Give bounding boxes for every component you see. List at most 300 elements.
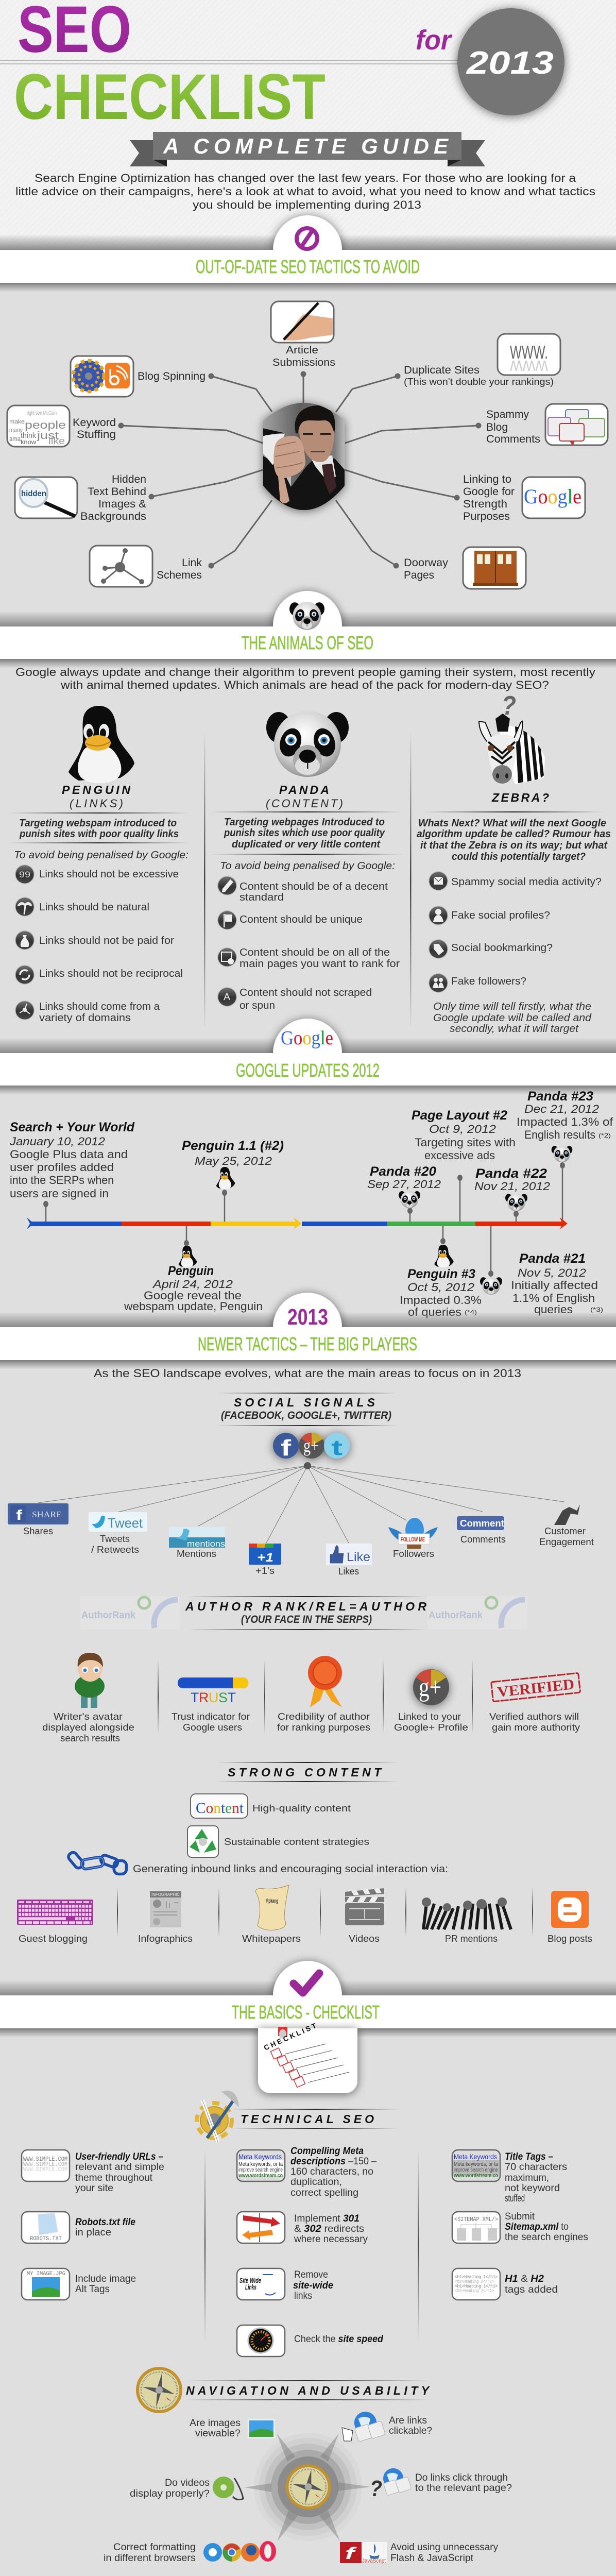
heading: author rank: AUTHOR RANK/REL=AUTHOR [185, 1600, 426, 1613]
heading: zebra: ZEBRA? [491, 791, 549, 804]
signal: customer engagement: Engagement [539, 1537, 594, 1547]
item: not excessive [15, 865, 179, 884]
item: site-wide links [237, 2268, 333, 2301]
icon: zebra with question mark [479, 691, 545, 784]
item: h1 h2 tags: <h1>Heading 1</h1> [455, 2284, 498, 2289]
zebra note: Google update will be called and [433, 1012, 592, 1024]
item: image alt tags [22, 2268, 136, 2300]
heading: author rank [185, 1600, 426, 1625]
heading: author rank: (YOUR FACE IN THE SERPS) [241, 1614, 372, 1625]
item: infographics: INFOGRAPHIC [151, 1892, 180, 1897]
signal: customer engagement: Customer [544, 1526, 586, 1536]
item: title tags: 70 characters [505, 2162, 567, 2173]
ribbon: a complete guide [130, 132, 485, 166]
event: search plus your world: Google Plus data and [10, 1148, 128, 1161]
icon: www: WWW [510, 358, 548, 375]
item: not scraped: or spun [239, 1000, 275, 1011]
item: whitepapers: Whitepapers [242, 1934, 301, 1944]
item: not scraped: Content should not scraped [239, 987, 372, 998]
icon: facebook google plus twitter: f [281, 1435, 291, 1461]
heading: the animals of seo: THE ANIMALS OF SEO [242, 632, 373, 653]
item: robots.txt: Robots.txt file [75, 2217, 135, 2228]
icon: facebook google plus twitter [273, 1433, 350, 1461]
item: flash and javascript [340, 2542, 498, 2564]
label: blog spinning: Blog Spinning [138, 370, 206, 382]
item: sitemap: <SITEMAP XML/> [454, 2216, 498, 2223]
title: CHECKLIST: CHECKLIST [14, 61, 326, 133]
item: images viewable: viewable? [195, 2428, 241, 2439]
icon: doors [463, 547, 526, 589]
icon: www [498, 334, 560, 375]
item: whitepapers [242, 1885, 301, 1944]
event: panda 20: Sep 27, 2012 [367, 1178, 441, 1191]
zebra description: algorithm update be called? Rumour has [417, 828, 611, 840]
item: user-friendly urls: your site [75, 2183, 113, 2194]
fan lines [38, 1466, 564, 1543]
heading: penguin: PENGUIN [62, 783, 130, 796]
label: duplicate sites: (This won't double your rankings) [404, 377, 554, 387]
heading: social signals: (FACEBOOK, GOOGLE+, TWITTER) [221, 1410, 391, 1421]
item: h1 h2 tags: <h2>Heading 2</h2> [455, 2279, 494, 2284]
heading: panda: PANDA [279, 783, 329, 796]
item: title tags: Title Tags – [505, 2151, 553, 2162]
item: links click through: ? [370, 2476, 382, 2501]
item: fake followers: Fake followers? [451, 976, 526, 987]
label: spammy blog comments: Spammy [486, 409, 529, 420]
event: penguin 3: Penguin #3 [407, 1267, 475, 1281]
item: verified stamp: gain more authority [492, 1722, 580, 1733]
item: title tags: improve search engine [454, 2167, 498, 2173]
item: title tags: stuffed [505, 2193, 525, 2204]
label: doorway pages [404, 557, 449, 581]
panel: newer tactics [8, 1367, 594, 1944]
image: man thumbs down [260, 399, 348, 513]
label: linking to google: Google for [463, 486, 515, 498]
penguin description [19, 818, 179, 840]
label: spammy blog comments [486, 409, 540, 445]
event: penguin 3: (*4) [465, 1309, 477, 1316]
item: inbound links [67, 1851, 448, 1875]
event: penguin: Penguin [168, 1264, 214, 1278]
event: panda 23: Panda #23 [527, 1089, 593, 1104]
item: videos [345, 1888, 384, 1944]
item: infographics [138, 1891, 193, 1944]
item: verified stamp: Verified authors will [489, 1711, 579, 1722]
zebra note: Only time will tell firstly, what the [433, 1001, 591, 1012]
item: guest blogging: Guest blogging [19, 1934, 88, 1944]
signal: comments: Comment [460, 1518, 504, 1529]
item: variety of domains: variety of domains [39, 1012, 131, 1024]
item: meta descriptions: descriptions –150 – [290, 2156, 377, 2167]
icon: panda [266, 711, 349, 777]
zebra description: could this potentially target? [452, 851, 586, 862]
label: doorway pages: Doorway [404, 557, 449, 569]
label: spammy blog comments: Blog [486, 421, 508, 433]
item: high quality content: Content [196, 1800, 244, 1817]
item: not scraped: A [224, 992, 230, 1002]
item: redirects [237, 2212, 368, 2245]
item: trust indicator [172, 1677, 250, 1733]
heading: panda: (CONTENT) [266, 797, 343, 810]
signal: followers: FOLLOW ME [401, 1536, 425, 1543]
item: social bookmarking: Social bookmarking? [451, 942, 553, 954]
intro text [15, 172, 595, 211]
item: social bookmarking [429, 939, 553, 959]
label: link schemes [157, 557, 202, 581]
item: natural [15, 897, 149, 917]
animals intro: with animal themed updates. Which animals are head of the pack for modern-day SEO? [60, 679, 549, 691]
event: penguin: webspam update, Penguin [124, 1300, 263, 1313]
column: zebra [417, 691, 611, 1035]
ribbon: a complete guide: A COMPLETE GUIDE [163, 134, 449, 158]
event: panda 22: Panda #22 [475, 1166, 547, 1181]
icon: www: WWW. [510, 342, 548, 363]
newer tactics intro: As the SEO landscape evolves, what are the main areas to focus on in 2013 [94, 1367, 521, 1380]
item: sitemap: the search engines [505, 2232, 588, 2243]
event: panda 23: Impacted 1.3% of [517, 1115, 613, 1128]
item: h1 h2 tags [452, 2268, 558, 2300]
item: robots.txt: ROBOTS.TXT [30, 2236, 62, 2242]
label: linking to google: Linking to [463, 473, 511, 485]
diagram: compass hub [245, 2433, 371, 2541]
event: page layout 2: Oct 9, 2012 [429, 1123, 496, 1136]
signal: likes: Likes [338, 1566, 359, 1577]
label: keyword stuffing [73, 417, 116, 440]
zebra note: secondly, what it will target [450, 1023, 579, 1035]
heading: navigation and usability: NAVIGATION AND USABILITY [186, 2384, 431, 2397]
label: linking to google: Strength [463, 498, 507, 510]
item: site speed [237, 2325, 383, 2357]
item: pr mentions: PR mentions [445, 1934, 498, 1944]
item: h1 h2 tags: H1 & H2 [505, 2274, 544, 2284]
item: links click through [370, 2468, 512, 2501]
intro text: Search Engine Optimization has changed over the last few years. For those who are looking for a [35, 172, 576, 184]
item: sitemap [452, 2211, 588, 2243]
event: penguin [124, 1264, 263, 1313]
item: user-friendly urls: User-friendly URLs – [75, 2151, 163, 2162]
item: user-friendly urls: WWW.SIMPLE.COM [23, 2156, 67, 2163]
icon: keyword cloud: ama [9, 435, 21, 443]
item: links clickable: Are links [389, 2415, 427, 2426]
intro text: little advice on their campaigns, here's a look at what to avoid, what you need to know and what tactics [15, 185, 595, 198]
event: penguin 3 [400, 1267, 482, 1318]
heading: the basics: THE BASICS - CHECKLIST [232, 2002, 380, 2023]
event: penguin 3: of queries [408, 1306, 461, 1318]
event: penguin: April 24, 2012 [152, 1278, 233, 1291]
item: trust indicator: Google users [183, 1722, 242, 1733]
intro text: you should be implementing during 2013 [193, 198, 421, 211]
item: site-wide links: Links [245, 2283, 256, 2291]
panda description [224, 817, 385, 850]
signal: plus ones [249, 1544, 281, 1576]
heading: social signals [221, 1396, 391, 1421]
signal: comments: Comments [460, 1534, 506, 1545]
item: guest blogging [17, 1900, 93, 1944]
timeline pins [43, 1162, 565, 1277]
label: hidden text [80, 473, 146, 522]
heading: newer tactics: NEWER TACTICS – THE BIG PLAYERS [198, 1333, 417, 1354]
item: meta descriptions: Meta Keywords [238, 2153, 282, 2161]
item: sustainable strategies: Sustainable content strategies [224, 1837, 369, 1847]
item: not paid: Links should not be paid for [39, 935, 174, 946]
signal: likes: Like [347, 1550, 370, 1564]
item: title tags: maximum, [505, 2173, 549, 2183]
item: h1 h2 tags: tags added [505, 2284, 558, 2295]
item: title tags: Meta Keywords [454, 2153, 497, 2161]
event: panda 22 [474, 1166, 550, 1193]
item: browsers: in different browsers [104, 2553, 196, 2564]
item: variety of domains [15, 1001, 160, 1024]
item: h1 h2 tags: <h1>Heading 1</h1> [455, 2275, 498, 2280]
badge: 2013: 2013 [287, 1304, 328, 1330]
icon: keyword cloud: just [37, 430, 59, 442]
item: meta descriptions [237, 2146, 377, 2198]
heading: strong content: STRONG CONTENT [228, 1766, 382, 1779]
icon: blog spinning [71, 356, 133, 397]
faded authorrank logos [80, 1596, 527, 1630]
item: inbound links: Generating inbound links and encouraging social interaction via: [133, 1863, 448, 1875]
item: spammy social: Spammy social media activity? [451, 876, 602, 888]
heading: out-of-date seo tactics: OUT-OF-DATE SEO TACTICS TO AVOID [196, 256, 420, 277]
event: search plus your world: into the SERPs when [10, 1174, 114, 1187]
item: user-friendly urls [22, 2150, 164, 2194]
animals intro [15, 666, 595, 691]
item: user-friendly urls: theme throughout [75, 2173, 153, 2183]
event: page layout 2: Page Layout #2 [412, 1108, 507, 1123]
signal: likes [326, 1544, 372, 1577]
signal: shares [8, 1503, 69, 1536]
panel: technical seo [22, 2091, 588, 2357]
item: not reciprocal [15, 965, 183, 985]
item: google plus profile [394, 1669, 468, 1733]
signal: tweets: Tweets [100, 1534, 130, 1544]
label: keyword stuffing: Stuffing [77, 429, 116, 440]
icon: zebra with question mark: ? [502, 691, 516, 721]
label: link schemes: Schemes [157, 569, 202, 581]
icon: magnifier hidden [15, 477, 77, 518]
item: unique [217, 910, 363, 930]
event: panda 20: Panda #20 [370, 1164, 436, 1179]
timeline icons [179, 1146, 572, 1295]
title: for: for [416, 25, 453, 56]
signal: mentions: mentions [187, 1539, 225, 1549]
event: panda 21: 1.1% of English [512, 1292, 595, 1304]
heading: panda [266, 783, 343, 810]
section band: the basics checklist [0, 1961, 616, 2038]
event: penguin 3: Oct 5, 2012 [407, 1281, 474, 1294]
label: article submissions [272, 345, 335, 368]
item: links click through: Do links click through [415, 2472, 508, 2483]
item: title tags: www.wordstream.co [453, 2173, 498, 2179]
event: page layout 2 [412, 1108, 516, 1162]
zebra description: Whats Next? What will the next Google [418, 818, 606, 829]
item: site-wide links: links [294, 2291, 312, 2301]
heading: penguin: (LINKS) [70, 797, 123, 810]
item: flash and javascript: Flash & JavaScript [390, 2553, 474, 2564]
icon: check mark [294, 1973, 319, 1993]
item: writer avatar: search results [60, 1733, 120, 1743]
item: flash and javascript: f [345, 2544, 357, 2563]
signal: comments [457, 1516, 506, 1545]
faded authorrank logos: AuthorRank [81, 1610, 135, 1621]
item: trust indicator: TRUST [191, 1690, 236, 1705]
label: article submissions: Submissions [272, 357, 335, 368]
label: hidden text: Images & [98, 498, 146, 510]
icon: keyword cloud: right see McCain [27, 410, 57, 416]
event: page layout 2: Targeting sites with [415, 1136, 516, 1149]
item: pr mentions [422, 1897, 511, 1944]
event: panda 21: Nov 5, 2012 [518, 1266, 586, 1279]
icon: gear and tools [197, 2091, 239, 2142]
section band: out-of-date tactics [0, 215, 616, 292]
item: decent standard [217, 876, 388, 903]
item: meta descriptions: correct spelling [290, 2188, 358, 2198]
event: search plus your world [9, 1120, 135, 1200]
item: not excessive: 99 [19, 870, 30, 879]
event: panda 23: Dec 21, 2012 [524, 1103, 599, 1115]
icon: facebook google plus twitter: g+ [303, 1435, 319, 1456]
item: image alt tags: Alt Tags [75, 2284, 110, 2295]
item: infographics: Infographics [138, 1934, 193, 1944]
zebra note [433, 1001, 592, 1035]
item: title tags [452, 2150, 567, 2204]
item: meta descriptions: 160 characters, no [290, 2166, 373, 2177]
item: redirects: & 302 redirects [294, 2224, 364, 2234]
item: not scraped [217, 987, 372, 1011]
heading: google updates 2012: GOOGLE UPDATES 2012 [236, 1060, 380, 1081]
icon: speech bubbles [545, 404, 608, 446]
icon: keyword cloud: think [21, 431, 36, 440]
signal: tweets: Tweet [108, 1515, 143, 1531]
item: writer avatar [42, 1653, 134, 1743]
icon: panda badge [289, 602, 324, 630]
item: variety of domains: Links should come from a [39, 1001, 160, 1012]
item: videos display [130, 2477, 243, 2500]
item: blog posts [547, 1891, 592, 1944]
event: panda 23: (*2) [598, 1132, 611, 1139]
item: site speed: Check the site speed [294, 2334, 383, 2345]
event: search plus your world: Search + Your World [10, 1120, 135, 1134]
item: redirects: where necessary [294, 2234, 368, 2245]
icon: keyword cloud: like [48, 436, 65, 446]
icon: article submissions [271, 301, 334, 343]
item: browsers: Correct formatting [113, 2542, 196, 2553]
event: panda 21 [511, 1251, 603, 1316]
subsection: strong content [17, 1762, 592, 1944]
heading: technical seo: TECHNICAL SEO [241, 2112, 374, 2126]
label: doorway pages: Pages [404, 569, 434, 581]
item: google plus profile: g+ [419, 1673, 441, 1702]
card: checklist: CHECKLIST [263, 2021, 318, 2052]
section band: newer tactics [0, 1293, 616, 1369]
chart: timeline 2012 [9, 1089, 613, 1318]
label: hidden text: Text Behind [88, 486, 146, 498]
item: not paid [15, 930, 174, 950]
icon: keyword cloud: people [25, 419, 66, 431]
item: credibility seal [277, 1656, 370, 1733]
signal: mentions: Mentions [177, 1549, 216, 1559]
item: whitepapers: Rpkang [266, 1898, 278, 1904]
item: user-friendly urls: WWW.SIMPLE.COM [23, 2166, 67, 2173]
item: images viewable: Are images [190, 2418, 241, 2429]
item: links clickable [342, 2412, 432, 2442]
icon: compass heading [136, 2367, 182, 2413]
year circle: 2013 [466, 45, 554, 81]
item: writer avatar: displayed alongside [42, 1722, 134, 1733]
item: user-friendly urls: WWW.SIMPLE.COM [23, 2161, 67, 2168]
event: page layout 2: excessive ads [424, 1149, 495, 1162]
item: meta descriptions: improve search engine [238, 2167, 283, 2173]
panda avoid label: To avoid being penalised by Google: [220, 860, 395, 872]
heading: social signals: SOCIAL SIGNALS [234, 1396, 375, 1409]
event: search plus your world: user profiles added [10, 1161, 114, 1174]
item: meta descriptions: www.wordstream.co [238, 2173, 283, 2179]
item: not excessive: Links should not be excessive [39, 869, 179, 880]
heading: penguin [62, 783, 130, 810]
item: meta descriptions: Compelling Meta [290, 2146, 364, 2157]
icon: keyword cloud: know [21, 438, 36, 446]
item: meta descriptions: Meta keywords, or ta [238, 2161, 283, 2167]
section band: google updates [0, 1019, 616, 1095]
item: credibility seal: for ranking purposes [277, 1722, 370, 1733]
event: penguin: Google reveal the [144, 1289, 242, 1302]
item: verified stamp: VERIFIED [497, 1676, 575, 1701]
item: sitemap: Sitemap.xml to [505, 2222, 569, 2232]
column: penguin [9, 706, 190, 1024]
item: links click through: to the relevant page? [415, 2483, 512, 2494]
label: hidden text: Hidden [112, 473, 146, 485]
event: panda 22: Nov 21, 2012 [474, 1180, 550, 1193]
item: decent standard: Content should be of a decent [239, 881, 388, 892]
event: panda 21: queries [534, 1303, 573, 1316]
item: sustainable strategies [187, 1826, 369, 1857]
timeline bar [27, 1217, 568, 1229]
year circle [457, 8, 564, 115]
panda description: Targeting webpages Introduced to [224, 817, 385, 828]
event: penguin 3: Impacted 0.3% [400, 1294, 482, 1307]
label: keyword stuffing: Keyword [73, 417, 116, 429]
label: duplicate sites [404, 364, 554, 387]
item: blog posts: Blog posts [547, 1934, 592, 1944]
event: panda 23: English results [524, 1128, 595, 1141]
item: fake profiles [429, 906, 550, 925]
signal: plus ones: +1's [255, 1566, 275, 1576]
item: writer avatar: Writer's avatar [54, 1711, 123, 1722]
item: links clickable: clickable? [389, 2426, 432, 2436]
label: linking to google: Purposes [463, 511, 510, 522]
event: panda 23 [517, 1089, 613, 1141]
item: redirects: Implement 301 [294, 2213, 360, 2224]
item: unique: Content should be unique [239, 914, 363, 925]
item: verified stamp [489, 1673, 580, 1733]
event: panda 21: Panda #21 [519, 1251, 586, 1266]
item: trust indicator: Trust indicator for [172, 1711, 250, 1722]
icon: keyword cloud: make [9, 419, 25, 425]
subsection: author rank [42, 1596, 580, 1743]
penguin description: punish sites with poor quality links [19, 828, 179, 840]
icon: keyword cloud: many [9, 427, 23, 433]
zebra description [417, 818, 611, 862]
signal: shares: SHARE [32, 1510, 62, 1519]
label: article submissions: Article [286, 345, 318, 356]
label: link schemes: Link [182, 557, 202, 569]
zebra description: it that the Zebra is on its way; but what [420, 840, 608, 851]
item: google plus profile: Google+ Profile [394, 1722, 468, 1733]
signal: shares: f [16, 1507, 23, 1523]
item: h1 h2 tags: <h2>Heading 2</h2> [455, 2289, 494, 2294]
section band: animals of seo [0, 591, 616, 668]
item: robots.txt [22, 2212, 135, 2243]
